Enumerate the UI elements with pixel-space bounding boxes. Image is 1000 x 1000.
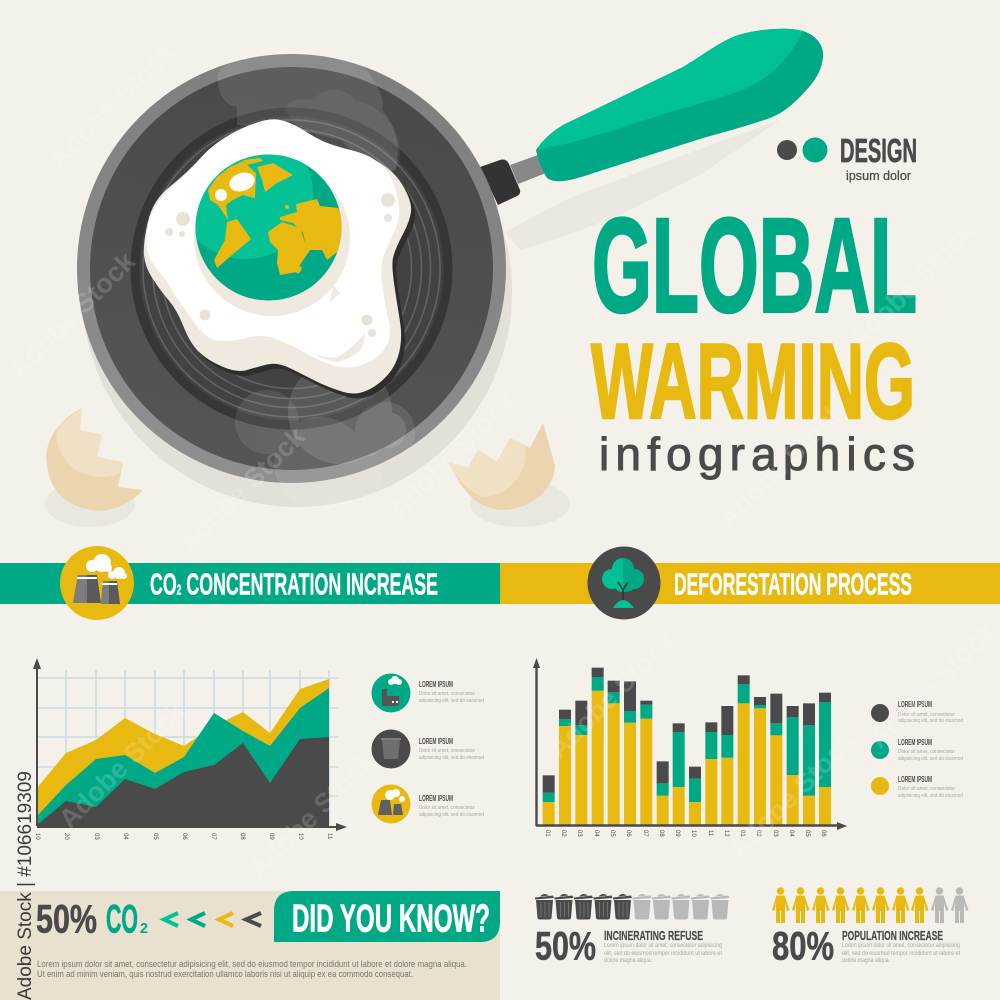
handle shaft: [510, 155, 546, 184]
body text: [37, 959, 467, 980]
legend: bar chart: [871, 700, 963, 799]
pan rings: [130, 108, 452, 430]
x labels: 07: [642, 830, 648, 837]
stat: 50% CO2: 50%: [36, 898, 97, 942]
stacked bar chart: [533, 658, 847, 837]
handle shadow: [505, 120, 780, 250]
x labels: 03: [576, 830, 582, 837]
x labels: 04: [122, 833, 128, 840]
arrows: [164, 913, 261, 926]
axes: [37, 665, 340, 827]
x labels: 08: [239, 833, 245, 840]
watermark: Adobe Stock: [43, 36, 182, 174]
legend text: adipisicing elit, sed do eiusmod: [419, 698, 484, 704]
stat: 80% population: 80%: [772, 924, 834, 968]
x labels: 09: [674, 830, 680, 837]
x labels: 03: [772, 830, 778, 837]
stat: 50% incinerating: elit, sed do eiusmod tempor incididunt ut labore et: [604, 950, 722, 957]
x labels: 06: [625, 830, 631, 837]
egg highlight: [315, 333, 365, 362]
x labels: 10: [34, 833, 40, 840]
watermark: Adobe Stock: [723, 726, 862, 864]
banner: deforestation: [500, 563, 1000, 604]
legend text: Dolor sit amet, consectetur: [419, 748, 475, 754]
legend: area chart: [372, 674, 484, 824]
x labels: 05: [804, 830, 810, 837]
stat: 80% population: [772, 924, 960, 968]
x labels: 07: [210, 833, 216, 840]
body text: Lorem ipsum dolor sit amet, consectetur adipisicing elit, sed do eiusmod tempor incididunt ut labore et dolore magna aliqua.: [37, 959, 467, 970]
egg bubbles: [165, 193, 395, 337]
banner: CO2: [0, 563, 500, 604]
stat: 50% incinerating: 50%: [535, 924, 596, 968]
watermark: Adobe Stock: [843, 216, 982, 354]
legend text: LOREM IPSUM: [419, 737, 453, 746]
title: infographics: [599, 428, 915, 480]
x labels: 09: [268, 833, 274, 840]
dark bars: [543, 668, 831, 793]
stat: 80% population: POPULATION INCREASE: [842, 928, 943, 943]
legend text: adipisicing elit, sed do eiusmod: [419, 755, 484, 761]
x labels: 01: [544, 830, 550, 837]
x labels: 05: [609, 830, 615, 837]
stat: 50% CO2: CO: [106, 898, 138, 942]
axes: [536, 665, 838, 826]
x labels: 05: [152, 833, 158, 840]
label: did you know: DID YOU KNOW?: [292, 898, 490, 940]
x labels: 08: [658, 830, 664, 837]
legend: bar chart: adipisicing elit, sed do eiusmod: [898, 756, 963, 762]
area chart: [33, 658, 347, 840]
ice caps: [215, 172, 255, 201]
stat: 80% population: elit, sed do eiusmod tempor incididunt ut labore et: [842, 950, 960, 957]
pan body: [77, 54, 506, 483]
body text: Ut enim ad minim veniam, quis nostrud exercitation ullamco laboris nisi ut aliquip ex ea commodo consequat.: [37, 969, 413, 980]
icon: power plant: [60, 546, 134, 620]
label: did you know: [274, 891, 500, 942]
x labels: 11: [326, 833, 332, 840]
stat: 50% incinerating: INCINERATING REFUSE: [604, 928, 703, 943]
stat: 80% population: Lorem ipsum dolor sit amet, consectetur adipisicing: [842, 942, 960, 949]
legend: bar chart: Dolor sit amet, consectetur: [898, 749, 955, 755]
watermark: Adobe Stock: [3, 246, 142, 384]
steam bottom: [235, 360, 415, 509]
yellow bars: [543, 691, 831, 825]
legend: bar chart: Dolor sit amet, consectetur: [898, 786, 955, 792]
pan shadow: [82, 77, 512, 507]
continents: [208, 158, 343, 275]
stat: 50% incinerating: [535, 924, 722, 968]
x labels: 02: [755, 830, 761, 837]
series green: [37, 688, 329, 826]
legend: bar chart: LOREM IPSUM: [898, 775, 932, 784]
brand text: [840, 132, 917, 183]
icon: factory: [372, 674, 410, 712]
brand text: DESIGN: [840, 132, 917, 169]
grid: [37, 670, 339, 825]
x labels: 04: [788, 830, 794, 837]
panel: did you know: [0, 891, 500, 1000]
pictogram: people: [772, 887, 968, 923]
icon: bin: [372, 730, 410, 768]
legend: bar chart: adipisicing elit, sed do eiusmod: [898, 718, 963, 724]
logo dots: [777, 138, 828, 162]
x labels: 03: [93, 833, 99, 840]
pan connector: [480, 160, 520, 205]
egg shadow: [148, 124, 415, 398]
watermark: Adobe Stock: [543, 626, 682, 764]
x labels: 11: [707, 830, 713, 837]
x labels: 02: [560, 830, 566, 837]
stat: 50% incinerating: dolore magna aliqua.: [604, 957, 652, 964]
heading: CO2 concentration: CO2 CONCENTRATION INCREASE: [150, 566, 438, 602]
watermark: Adobe Stock: [173, 421, 312, 559]
legend: bar chart: Dolor sit amet, consectetur: [898, 712, 955, 718]
yolk shadow: [194, 160, 350, 316]
x labels: 12: [723, 830, 729, 837]
stock id: Adobe Stock | #106619309: [15, 771, 36, 1000]
legend text: adipisicing elit, sed do eiusmod: [419, 812, 484, 818]
legend text: Dolor sit amet, consectetur: [419, 805, 475, 811]
x labels: 01: [739, 830, 745, 837]
legend text: [419, 680, 484, 818]
x labels: [34, 833, 332, 840]
x labels: 20: [63, 833, 69, 840]
watermark: Adobe Stock: [863, 616, 1000, 754]
icon: plant: [372, 784, 410, 824]
steam top: [217, 12, 400, 175]
frying pan illustration: [77, 12, 823, 509]
egg white shade: [144, 119, 411, 393]
globe: [196, 154, 342, 300]
x labels: 10: [297, 833, 303, 840]
watermark: Adobe Stock: [383, 386, 522, 524]
legend: bar chart: adipisicing elit, sed do eiusmod: [898, 793, 963, 799]
egg white: [146, 119, 399, 368]
brand text: ipsum dolor: [846, 168, 912, 183]
title: [591, 192, 917, 480]
watermark: Adobe Stock: [243, 746, 382, 884]
x labels: [544, 830, 826, 837]
watermark: Adobe Stock: [53, 696, 192, 834]
series yellow: [37, 679, 329, 826]
pictogram: trash bins: [535, 894, 730, 920]
egg: [144, 119, 415, 398]
stat: 50% incinerating: Lorem ipsum dolor sit amet, consectetur adipisicing: [604, 942, 722, 949]
x labels: 04: [593, 830, 599, 837]
x labels: 10: [690, 830, 696, 837]
left eggshell: [45, 408, 143, 527]
x labels: 06: [820, 830, 826, 837]
legend text: LOREM IPSUM: [419, 680, 453, 689]
green bars: [543, 677, 831, 802]
legend text: LOREM IPSUM: [419, 794, 453, 803]
pan handle: [536, 29, 823, 181]
legend text: Dolor sit amet, consectetur: [419, 691, 475, 697]
icon: tree: [588, 546, 660, 620]
legend: bar chart: LOREM IPSUM: [898, 738, 932, 747]
stat: 50% CO2: 2: [140, 920, 148, 937]
right eggshell: [448, 423, 570, 527]
legend: bar chart: LOREM IPSUM: [898, 700, 932, 709]
watermark: Adobe Stock: [713, 396, 852, 534]
series dark: [37, 737, 329, 826]
stat: 80% population: dolore magna aliqua.: [842, 957, 890, 964]
x labels: 06: [181, 833, 187, 840]
